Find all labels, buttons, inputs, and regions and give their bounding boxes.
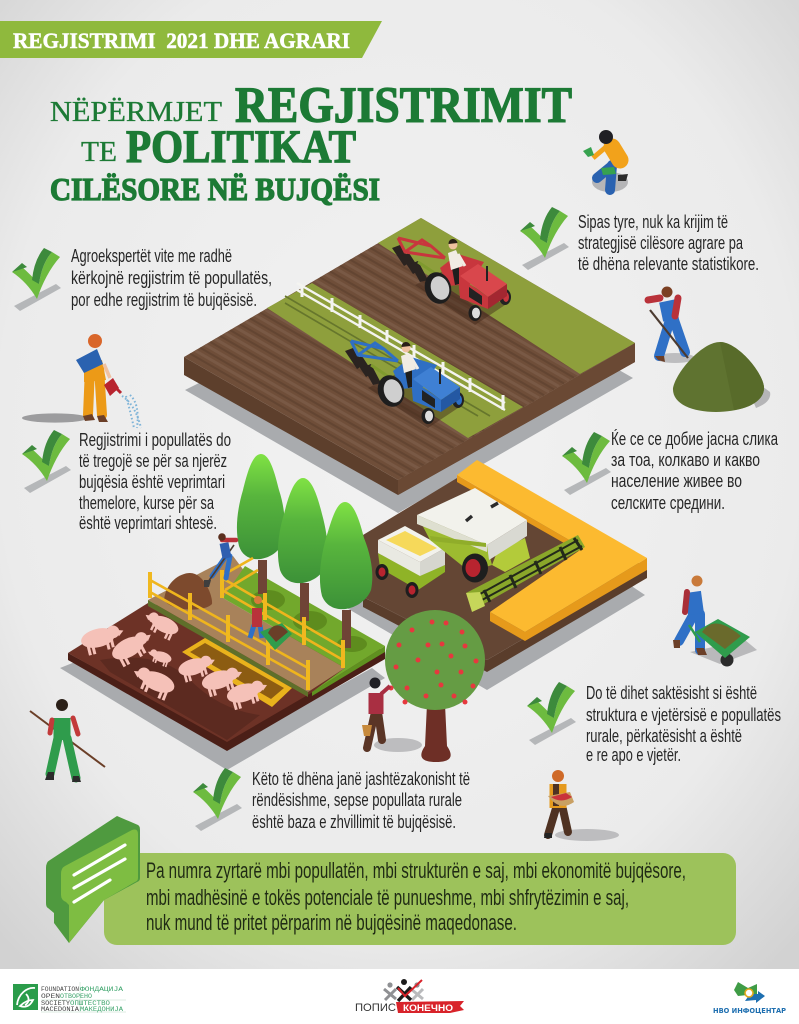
- earth block: [68, 650, 385, 751]
- trough: [182, 638, 292, 707]
- text: macedonian: селските средини.: [611, 493, 725, 513]
- logo: Foundation Open Society Macedonia: SOCIETY: [41, 1000, 70, 1007]
- check 5: [527, 682, 576, 745]
- farmer digging: [204, 533, 236, 587]
- tree 2: [278, 478, 328, 621]
- section banner: REGJISTRIMI 2021 DHE AGRARI: [13, 28, 350, 53]
- text: population census: [79, 430, 231, 533]
- callout panel: [104, 853, 736, 945]
- woman with watering can: [22, 334, 141, 428]
- farmer with wheelbarrow: [250, 596, 292, 650]
- text: macedonian: [611, 429, 779, 513]
- combine harvester: [417, 488, 530, 582]
- title: [50, 78, 572, 207]
- text: rural base: [252, 769, 470, 832]
- plot shadow: [345, 585, 645, 690]
- section banner: [0, 21, 382, 58]
- compost mound: [673, 342, 770, 412]
- icon: speech bubble: [46, 816, 140, 943]
- check 1: [12, 248, 61, 311]
- harvested yellow crop strip: [457, 460, 647, 641]
- tractor red: [392, 238, 511, 325]
- text: agroexperts: por edhe regjistrim të bujqësisë.: [71, 290, 257, 310]
- plot soil block: [184, 218, 635, 495]
- pigs: [79, 609, 271, 711]
- farmer with wheelbarrow, soil: [673, 576, 757, 666]
- text: macedonian: население живее во: [611, 471, 742, 491]
- logo: NVO Infocentar: НВО ИНФОЦЕНТАР: [713, 1007, 786, 1015]
- woman with apple basket: [544, 770, 619, 841]
- footer strip: [0, 969, 799, 1024]
- logo: Foundation Open Society Macedonia: ФОНДАЦИЈА: [80, 986, 123, 993]
- yellow fences: [150, 558, 343, 690]
- logo: NVO Infocentar: [713, 982, 786, 1015]
- farm plot: ploughed field with tractors: [184, 218, 635, 513]
- logo: Foundation Open Society Macedonia: OPEN: [41, 993, 60, 1000]
- callout text: [146, 858, 686, 935]
- text: population census: është veprimtari shtesë.: [79, 513, 217, 533]
- tree 3: [320, 502, 372, 648]
- text: age structure: rurale, përkatësisht a është: [586, 726, 742, 746]
- title: POLITIKAT: [126, 121, 356, 173]
- pen shadow: [60, 660, 385, 770]
- text: rural base: rëndësishme, sepse popullata rurale: [252, 790, 462, 810]
- text: population census: themelore, kurse për sa: [79, 493, 215, 513]
- text: agroexperts: kërkojnë regjistrim të popullatës,: [71, 268, 272, 288]
- title: TE: [81, 137, 117, 168]
- check 4: [562, 432, 611, 495]
- text: agroexperts: [71, 246, 272, 310]
- text: age structure: [586, 683, 781, 765]
- check 3: [22, 430, 71, 493]
- tree 1: [237, 454, 285, 594]
- raised green bed: [223, 566, 385, 696]
- apple tree: [385, 610, 485, 762]
- title: CILËSORE NË BUJQËSI: [50, 171, 380, 207]
- text: strategy: Sipas tyre, nuk ka krijim të: [578, 212, 728, 232]
- text: strategy: [578, 212, 759, 274]
- logo: Foundation Open Society Macedonia: FOUNDATION: [41, 986, 79, 993]
- tractor blue: [345, 341, 464, 428]
- apple picker: [362, 678, 422, 752]
- raised tan path: [148, 556, 345, 692]
- text: rural base: Këto të dhëna janë jashtëzakonisht të: [252, 769, 470, 789]
- grass strip far: [378, 218, 635, 374]
- logo: Popis Konechno: КОНЕЧНО: [403, 1003, 453, 1014]
- logo: Foundation Open Society Macedonia: [13, 982, 126, 1013]
- title: NËPËRMJET: [50, 97, 222, 128]
- text: rural base: është baza e zhvillimit të bujqësisë.: [252, 812, 456, 832]
- text: macedonian: за тоа, колкаво и какво: [611, 450, 760, 470]
- logo: Popis Konechno: ПОПИС: [355, 1002, 396, 1014]
- check 2: [520, 207, 569, 270]
- text: population census: Regjistrimi i popullatës do: [79, 430, 231, 450]
- plot ground shadow: [185, 366, 633, 513]
- combine header: [466, 535, 585, 612]
- check 6: [193, 768, 242, 831]
- text: population census: të tregojë se për sa njerëz: [79, 451, 227, 471]
- farmer with shovel: [648, 286, 695, 363]
- plot: harvest field with combine: [345, 460, 647, 690]
- fence white: [285, 283, 505, 416]
- grass strip middle: [267, 283, 523, 438]
- farmer with rake: [30, 699, 105, 782]
- soil heap: [164, 573, 212, 610]
- title: REGJISTRIMIT: [235, 78, 572, 134]
- text: agroexperts: Agroekspertët vite me radhë: [71, 246, 232, 266]
- text: age structure: e re apo e vjetër.: [586, 745, 681, 765]
- text: population census: bujqësia është veprimtari: [79, 472, 225, 492]
- logo: Foundation Open Society Macedonia: MACEDONIA: [41, 1006, 79, 1013]
- soil block: [363, 567, 647, 672]
- logo: Popis Konechno: [355, 979, 464, 1014]
- plot: livestock pen with trees: [60, 454, 385, 770]
- logo: Foundation Open Society Macedonia: МАКЕДОНИЈА: [80, 1006, 123, 1013]
- grain cart: [376, 526, 445, 598]
- callout text: nuk mund të pritet përparim në bujqësinë maqedonase.: [146, 910, 517, 935]
- farmer kneeling with seedling: [583, 130, 628, 192]
- logo: Foundation Open Society Macedonia: ОПШТЕСТВО: [70, 1000, 110, 1007]
- logo: Foundation Open Society Macedonia: ОТВОРЕНО: [60, 993, 92, 1000]
